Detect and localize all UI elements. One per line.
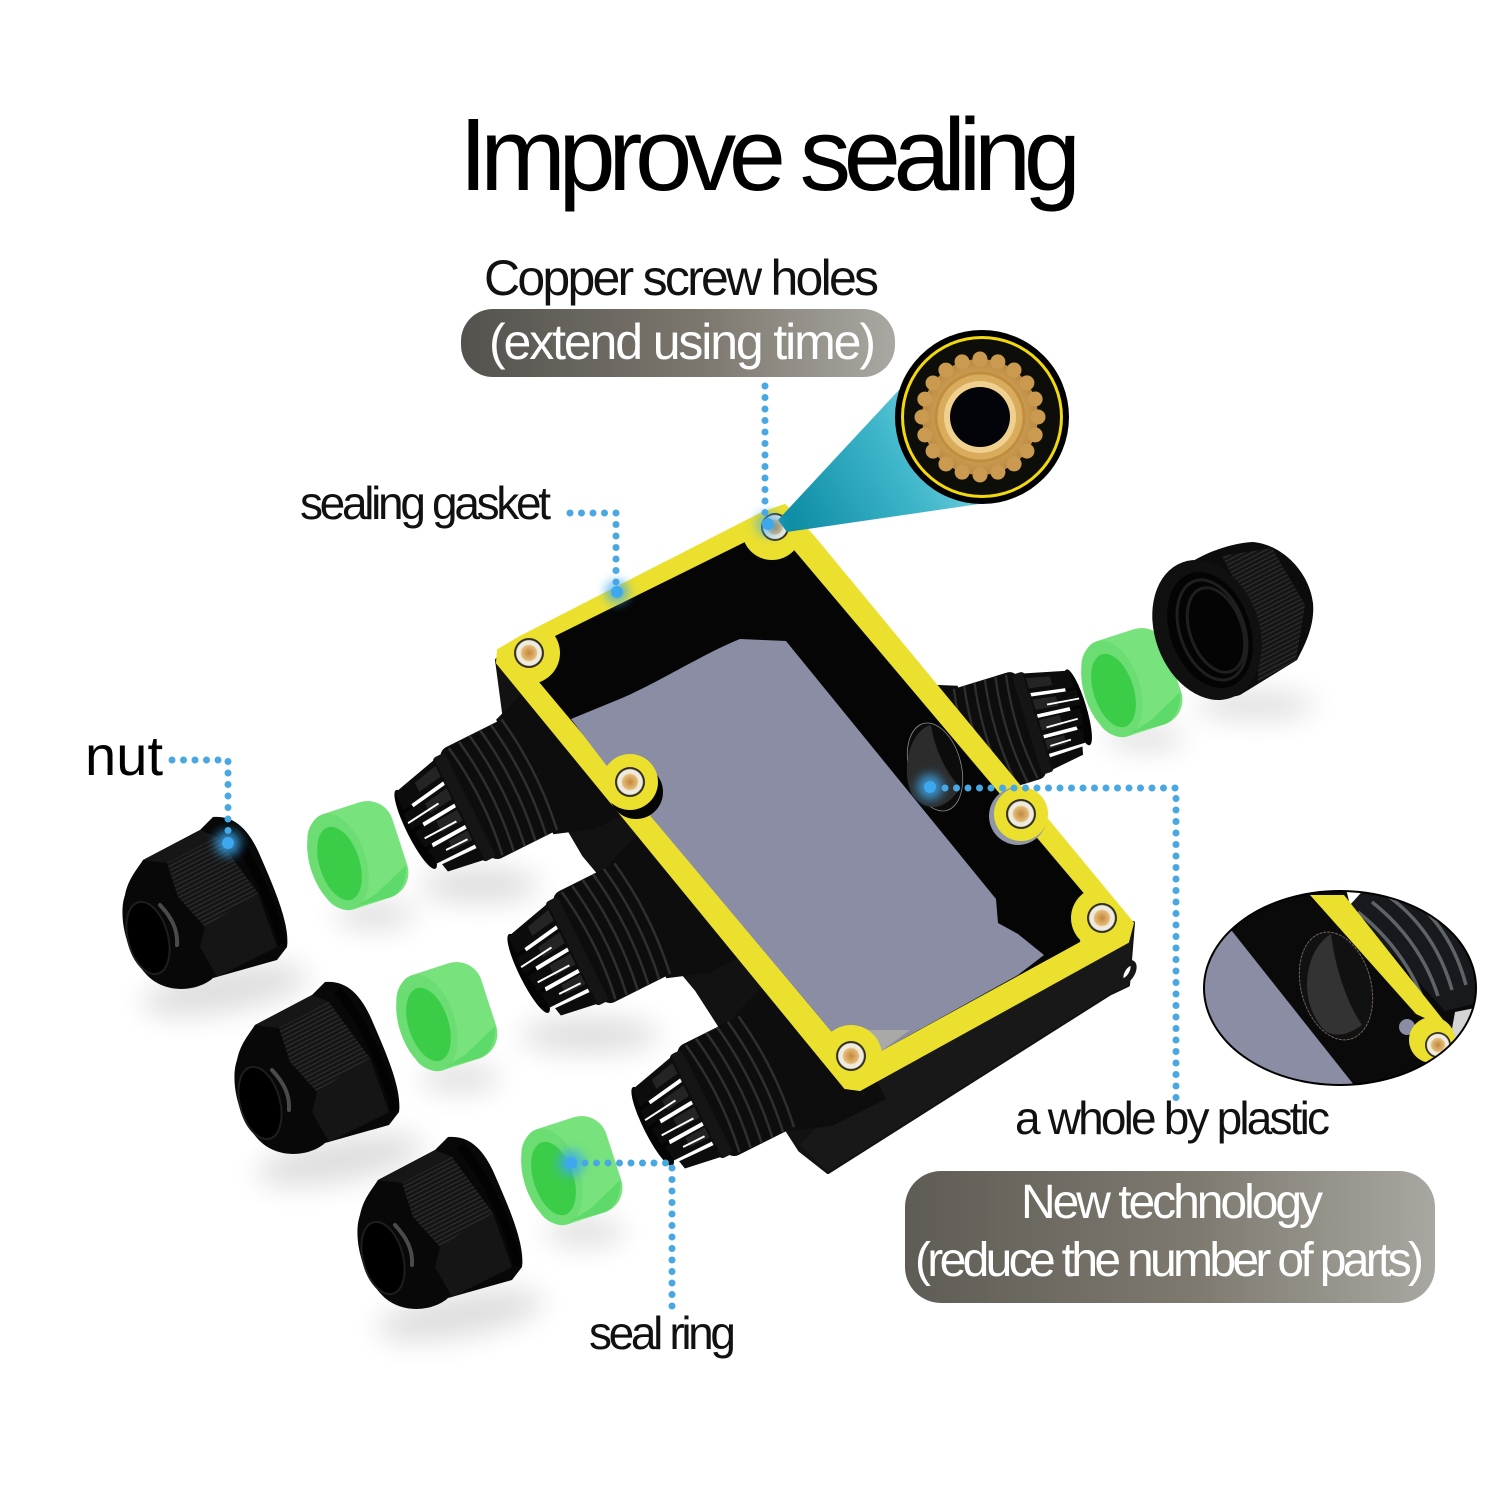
- label: a whole by plastic: a whole by plastic: [1015, 1092, 1330, 1144]
- boss, middle right: [989, 787, 1048, 845]
- seal ring 2: [385, 955, 504, 1079]
- title: Improve sealing: [459, 97, 1081, 212]
- label: copper screw holes: Copper screw holes: [484, 250, 879, 306]
- label: nut: nut: [85, 724, 163, 787]
- seal ring 4: [1070, 621, 1189, 745]
- gland 3: [611, 960, 886, 1202]
- nut 3: [354, 1137, 522, 1309]
- box interior: [539, 541, 1087, 1051]
- grey reflection near bottom corner: [831, 1030, 910, 1051]
- pill: new technology: [905, 1171, 1435, 1303]
- nut 1: [119, 817, 287, 989]
- pill: new technology: (reduce the number of parts): [915, 1234, 1424, 1287]
- dotted leaders: [172, 386, 1176, 1310]
- nut, right side, open end: [1134, 542, 1313, 715]
- yellow sealing gasket rim: [497, 505, 1133, 1090]
- soft shadows: [137, 691, 1315, 1351]
- infographic canvas: [88, 116, 1477, 1358]
- label: sealing gasket: sealing gasket: [300, 477, 551, 529]
- nut 2: [231, 982, 399, 1154]
- gland 1: [374, 663, 649, 905]
- seal ring 1: [296, 794, 415, 918]
- boss, middle left: [602, 754, 663, 819]
- moulded oval: whole plastic: [898, 717, 972, 817]
- junction box body: [497, 660, 1136, 1172]
- brass screw holes: [514, 513, 1117, 1071]
- seal ring 3: [510, 1109, 629, 1233]
- label: seal ring: seal ring: [589, 1307, 736, 1359]
- pill: new technology: New technology: [1021, 1176, 1323, 1229]
- zoom cone: screw hole: [778, 335, 993, 532]
- inset: whole plastic detail: [1200, 885, 1490, 1095]
- inset: copper screw hole: [895, 330, 1069, 504]
- leader glow points: [215, 511, 943, 1176]
- gland, right: [868, 640, 1107, 834]
- gland 2: [487, 807, 762, 1049]
- pill: extend using time: (extend using time): [489, 314, 876, 370]
- screw bosses: [539, 541, 1087, 1051]
- interior grey floor: [571, 639, 1044, 1051]
